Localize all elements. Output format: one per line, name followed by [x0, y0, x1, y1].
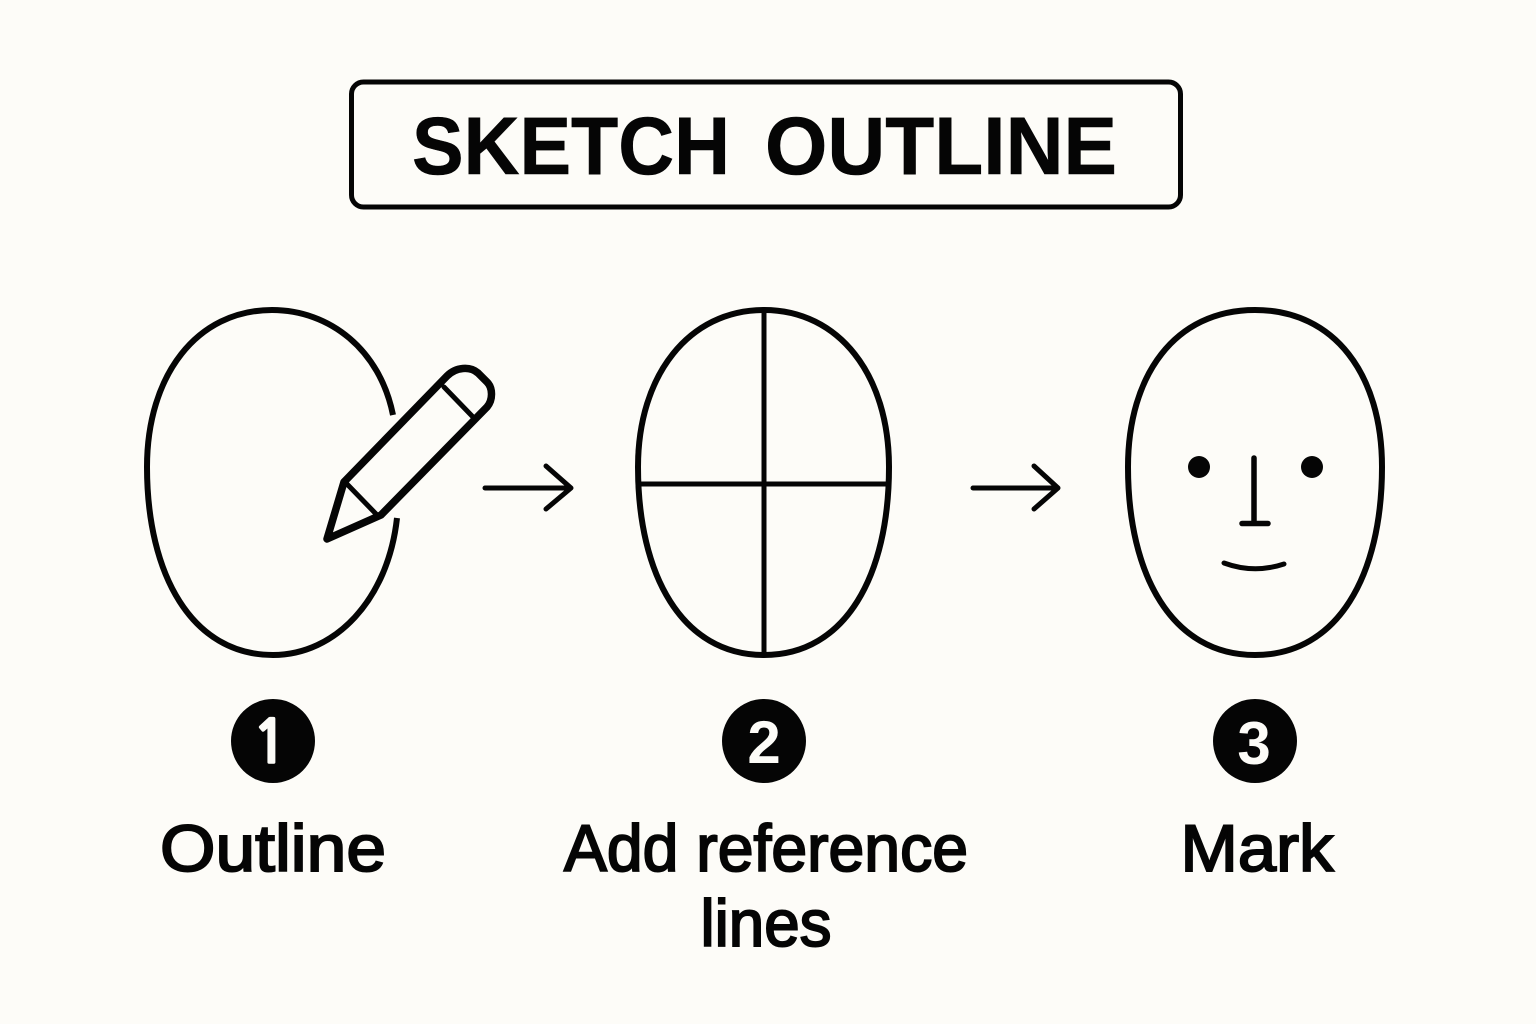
- arrow: step 1 to 2: [485, 466, 571, 509]
- icon: nose: [1242, 458, 1268, 524]
- label: add reference lines: Add reference: [564, 811, 968, 885]
- arrow: step 2 to 3: [973, 466, 1058, 509]
- step 3 badge: 3: [1237, 710, 1271, 777]
- icon: mouth: [1224, 563, 1284, 569]
- step 2 badge: 2: [747, 709, 781, 776]
- label: add reference lines: [564, 811, 968, 960]
- label: mark: Mark: [1180, 811, 1335, 885]
- panel: step 1 outline: [147, 310, 397, 655]
- icon: head outline with gap: [147, 310, 397, 655]
- panel: step 2 reference lines: [638, 310, 889, 655]
- title: SKETCH: [412, 101, 730, 192]
- icon: right eye: [1301, 456, 1323, 478]
- title: [352, 82, 1180, 207]
- panel: step 3 face marks: [1128, 310, 1382, 655]
- step 1 badge: [231, 699, 315, 783]
- icon: pencil: [327, 368, 492, 539]
- step 3 badge: [1213, 699, 1297, 783]
- icon: left eye: [1188, 456, 1210, 478]
- step 2 badge: [722, 699, 806, 783]
- title: OUTLINE: [765, 101, 1117, 192]
- label: outline: Outline: [160, 811, 386, 885]
- step 1 badge: 1: [252, 713, 288, 772]
- label: add reference lines: lines: [700, 886, 832, 960]
- icon: face outline: [1128, 310, 1382, 655]
